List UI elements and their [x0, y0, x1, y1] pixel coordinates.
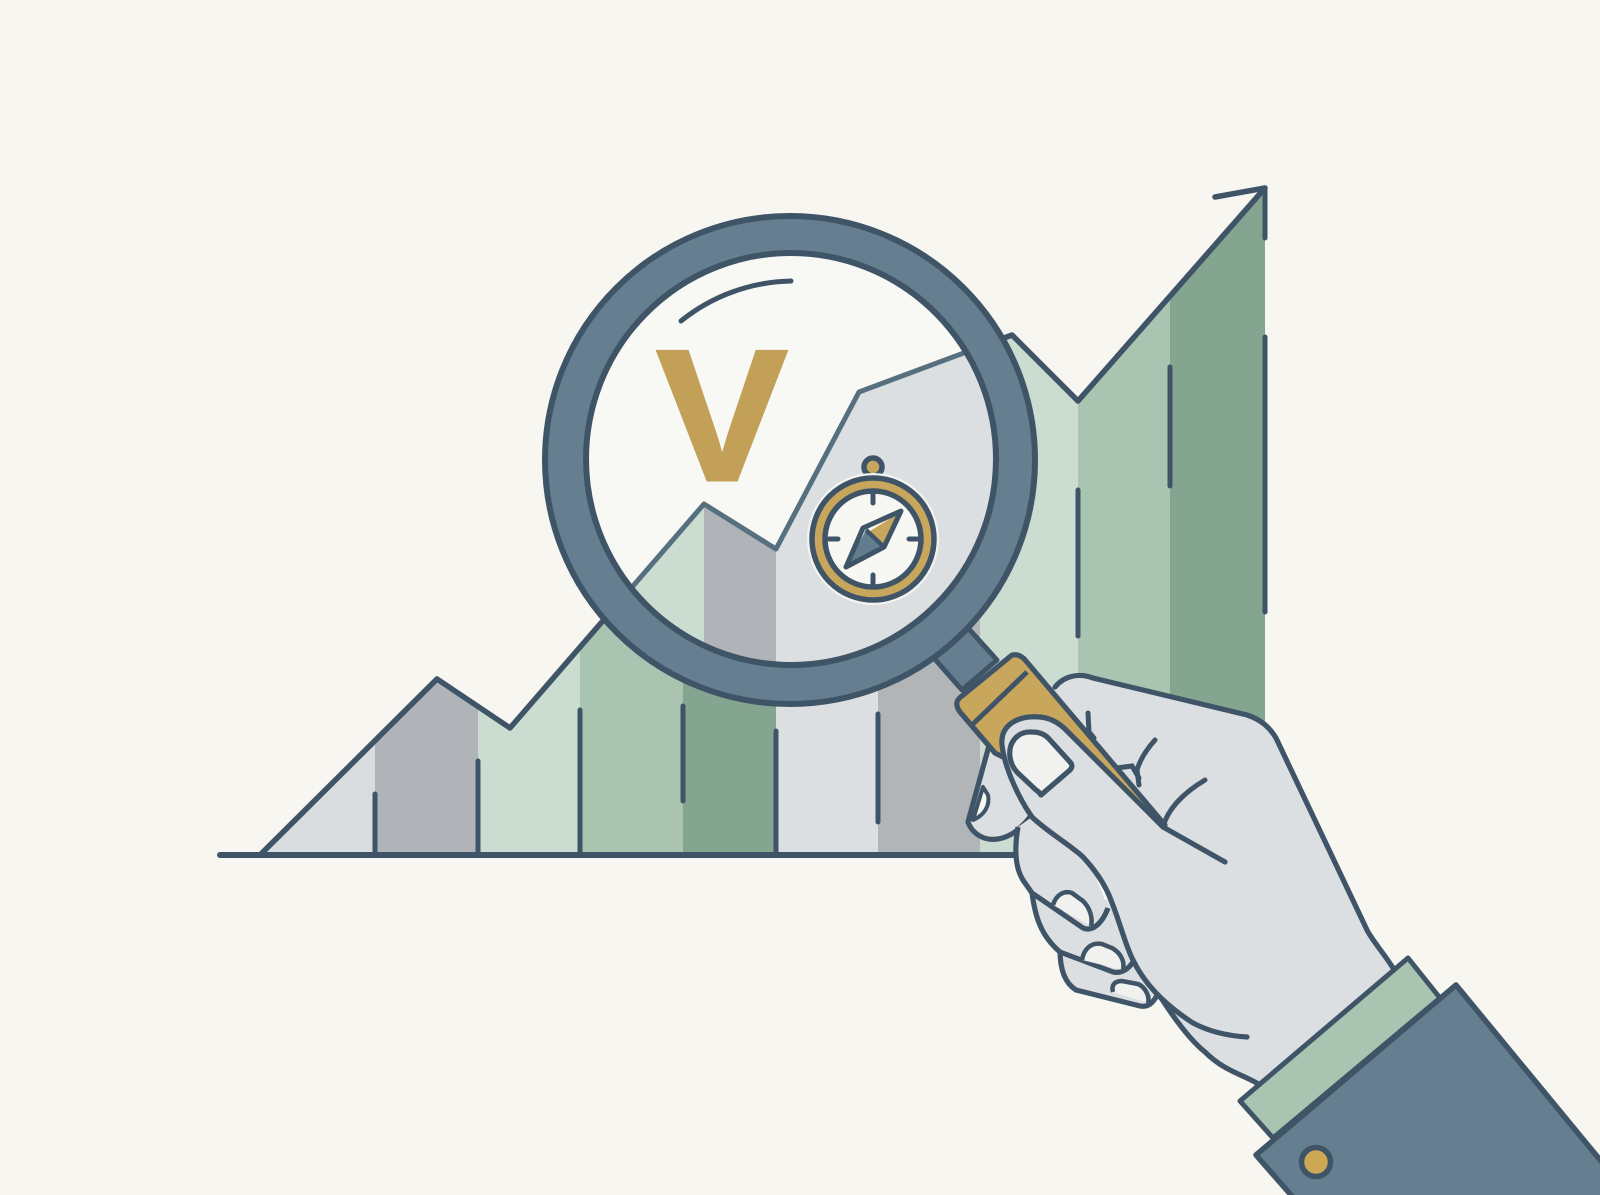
palm creases — [1087, 713, 1205, 828]
magnifier ring — [545, 216, 1035, 704]
third finger — [1060, 950, 1160, 1006]
chart baseline — [220, 852, 1040, 858]
thumb fill — [1002, 717, 1247, 1037]
sleeve button — [1302, 1148, 1330, 1176]
magnifier handle connector — [933, 628, 997, 690]
hand: finger nail sliver — [973, 787, 988, 820]
shirt cuff — [1240, 958, 1440, 1138]
letter V: V — [656, 311, 788, 520]
first finger — [1016, 817, 1108, 929]
chart bands — [262, 180, 1265, 860]
illustration: hand holding a magnifier over a rising chart — [217, 185, 1600, 1195]
chart trend line with arrow — [262, 188, 1265, 853]
thumb outline — [1002, 717, 1247, 1037]
thumb nail — [1010, 732, 1072, 795]
palm outline — [1055, 675, 1393, 1085]
hand: finger behind the handle — [968, 742, 1045, 839]
icon: compass — [807, 458, 939, 605]
chart grid ticks — [375, 188, 1265, 855]
palm and wrist — [1000, 670, 1393, 1085]
magnifier lens contents — [632, 278, 993, 662]
hand — [957, 655, 1393, 1085]
jacket sleeve — [1256, 985, 1600, 1195]
chart: rising area with coloured bands — [220, 180, 1265, 860]
magnified chart bands — [632, 351, 993, 662]
lens glint arc — [681, 281, 791, 321]
magnifier handle: gold grip — [957, 655, 1165, 825]
second finger — [1032, 893, 1134, 972]
